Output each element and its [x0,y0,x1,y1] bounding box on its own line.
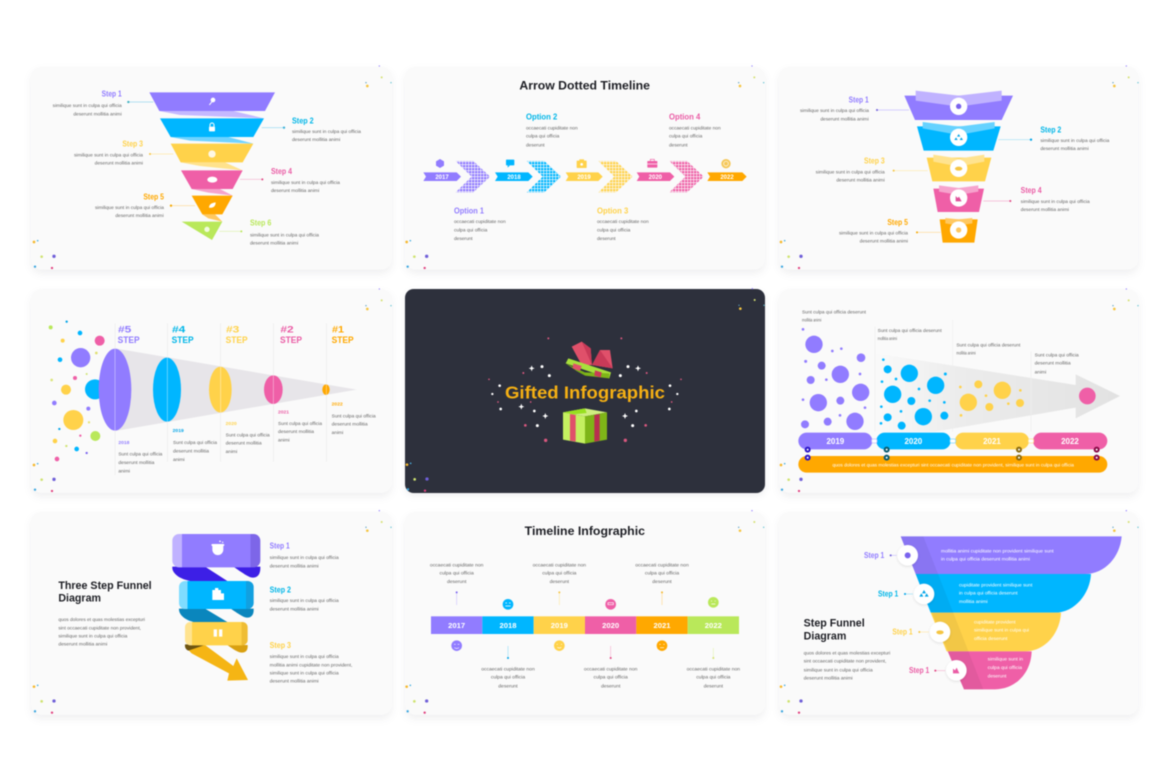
panel: dark cover [405,288,765,493]
option 2 [526,113,578,148]
option 4: occaecati cupiditate non [669,125,721,131]
step 6 label: Step 6 [250,219,272,228]
year ribbons: 2020 [649,175,663,181]
step 2 label: similique sunt in culpa qui officia [1040,138,1110,144]
description: deserunt mollitia animi [804,675,853,681]
heading: Diagram [58,593,101,605]
step label 1: Step 1 [864,551,885,560]
icon: open gift lid and bow [566,342,613,378]
top captions: culpa qui officia [440,571,474,577]
title: Timeline Infographic [525,524,645,538]
step 4 label: Step 4 [1021,186,1042,195]
band text: similique sunt in culpa qui [974,628,1029,634]
connector pins [806,448,1099,460]
top captions: occaecati cupiditate non [635,562,689,568]
bottom captions: culpa qui officia [696,675,731,681]
step 1 label: deserunt mollitia animi [820,116,869,122]
grey arrow [875,353,1120,432]
caption 2020: mollitia animi [878,336,897,342]
timeline bar: 2020 [602,621,619,630]
step 2 label: deserunt mollitia animi [292,137,340,143]
2019 text: deserunt mollitia [173,448,209,454]
description [58,617,145,648]
caption 2019: mollitia animi [802,318,821,324]
sparkles [488,337,682,442]
2018 text: animi [118,468,130,474]
heading #1 step: STEP [332,335,354,345]
ribbon funnel [172,534,260,681]
blue bubbles [880,358,948,430]
step 4 label [983,186,1090,213]
option 4: Option 4 [669,113,701,122]
band text: cupiditate provident similique sunt [959,582,1033,588]
step label 3: Step 1 [892,628,913,637]
band text [941,548,1054,679]
top captions: deserunt [550,579,570,585]
caption 2021: Sunt culpa qui officia deserunt [956,342,1021,348]
step 1 text: Step 1 [270,541,290,550]
heading #4 step: STEP [172,335,194,345]
caption 2022: deserunt mollitia [1035,361,1071,367]
step 4 label: similique sunt in culpa qui officia [271,180,340,186]
step label 3 [892,628,929,637]
year ribbons: 2018 [507,175,521,181]
emoji icons [451,597,719,651]
dotted chevrons [456,161,704,192]
step 5 label: deserunt mollitia animi [115,213,164,219]
funnel [149,92,275,240]
caption 2022: Sunt culpa qui officia [1035,353,1079,359]
step 5 label: Step 5 [143,192,164,201]
step 3 text: deserunt mollitia animi [270,679,319,685]
top captions: deserunt [447,579,467,585]
icon: gift box [563,408,607,444]
timeline bar: 2022 [705,621,722,630]
caption 2019 [802,310,867,324]
heading: Step Funnel [804,618,865,630]
2020 text: 2020 [226,421,237,427]
description: sint occaecati cupiditate non provident, [58,625,141,631]
step 3 text: Step 3 [270,641,291,650]
funnel [904,91,1013,243]
2019 text: animi [173,457,185,463]
heading #2 step: STEP [280,335,302,345]
step 5 label: similique sunt in culpa qui officia [839,231,908,237]
step 3 label: deserunt mollitia animi [95,161,143,167]
heading [58,580,152,605]
step 3 label: similique sunt in culpa qui officia [74,153,143,159]
yellow bubbles [959,380,1024,417]
divider lines [115,323,326,475]
step 2 label: Step 2 [1040,125,1062,134]
bottom captions: culpa qui officia [594,675,628,681]
2018 text: Sunt culpa qui officia [118,452,163,458]
option 1: deserunt [454,236,473,242]
step 4 label [240,167,340,194]
heading: Three Step Funnel [58,580,152,592]
step 5 label [839,218,941,245]
step 1 label: similique sunt in culpa qui officia [800,108,869,114]
step 6 label: deserunt mollitia animi [250,240,298,246]
band text: in culpa qui officia deserunt mollitia animi [941,556,1030,562]
step 3 label [816,156,928,183]
description: quos dolores et quas molestias excepturi [804,650,890,656]
ellipses [99,349,330,431]
top captions: culpa qui officia [645,571,679,577]
2020 text: deserunt mollitia [226,441,262,447]
option 2: occaecati cupiditate non [526,125,578,131]
timeline bar: 2018 [499,621,517,630]
caption 2020: Sunt culpa qui officia deserunt [878,328,942,334]
timeline bar: 2019 [551,621,568,630]
caption 2019: Sunt culpa qui officia deserunt [802,310,867,316]
year ribbons: 2017 [435,175,449,181]
step label 4 [909,666,945,675]
heading #5 step [118,324,140,345]
heading #3 step: STEP [226,335,248,345]
step 2 text [270,585,339,612]
2022 text: Sunt culpa qui officia [332,413,376,419]
2021 text [278,409,322,444]
2022 text: animi [332,430,343,436]
step 4 label: Step 4 [271,167,292,176]
timeline bar: 2017 [448,621,465,630]
2021 text: animi [278,438,290,444]
caption 2020 [878,328,942,342]
panel: layered funnel with five steps [779,65,1139,270]
heading #3 step [226,324,248,345]
panel: step funnel diagram [779,510,1139,715]
step 2 label [998,125,1110,152]
year ribbons [423,172,747,181]
heading #1 step [332,324,354,345]
top captions: occaecati cupiditate non [430,562,484,568]
step 3 label: Step 3 [122,140,143,149]
step label 2 [878,589,913,598]
panel: timeline infographic [405,510,765,715]
step 2 label: Step 2 [292,116,314,125]
2021 text: deserunt mollitia [278,429,314,435]
option 3: occaecati cupiditate non [597,219,649,225]
2018 text [118,440,163,474]
step label 4: Step 1 [909,666,930,675]
title: Arrow Dotted Timeline [519,79,650,93]
step 5 label: similique sunt in culpa qui officia [95,205,164,211]
2020 text [226,421,270,455]
orange bar: quos dolores et quas molestias excepturi sint occaecati cupiditate non provident, similique sunt in culpa qui officia [832,463,1074,469]
description: deserunt mollitia animi [58,642,107,648]
stems [456,591,714,659]
purple bubbles [801,328,869,430]
heading #2 step: #2 [280,324,294,334]
step 2 text: similique sunt in culpa qui officia [270,598,339,604]
2022 text: 2022 [332,401,343,407]
2018 text: 2018 [118,440,130,446]
panel: cone steps with ellipses [31,288,392,493]
step 3 text: mollitia animi cupiditate non provident, [270,662,352,668]
step 2 label [262,116,361,143]
year ribbons: 2019 [577,175,591,181]
band text: culpa qui officia [988,665,1022,671]
heading: Diagram [804,631,846,643]
top captions: deserunt [652,579,672,585]
band text: mollitia animi [959,599,988,605]
step 6 label [219,219,319,246]
heading #2 step [280,324,302,345]
option 4: culpa qui officia [669,134,703,140]
option 3: Option 3 [597,207,629,216]
step 2 label: similique sunt in culpa qui officia [292,129,361,135]
step label 2: Step 1 [878,589,899,598]
panel: arrow dotted timeline [405,65,765,270]
step 1 label: Step 1 [849,95,869,104]
step 4 label: deserunt mollitia animi [1021,207,1069,213]
description [804,650,890,681]
option 4 [669,113,721,148]
divider lines [875,320,1031,432]
step 3 label [74,140,173,167]
year ribbons: 2022 [720,175,734,181]
heading #5 step: STEP [118,335,140,345]
description: similique sunt in culpa qui officia [58,634,128,640]
top captions: occaecati cupiditate non [533,562,586,568]
step 4 label: deserunt mollitia animi [271,188,319,194]
scattered bubbles [49,320,105,461]
step 1 label [53,90,153,117]
step 5 label: Step 5 [887,218,908,227]
step 1 text [270,541,339,569]
timeline icons [436,159,731,168]
band text: similique sunt in [988,657,1023,663]
timeline bar: 2021 [653,621,671,630]
step 3 text [270,641,352,685]
band text: cupiditate provident [974,619,1016,625]
heading #5 step: #5 [118,324,131,334]
heading #4 step: #4 [172,324,185,334]
top captions: culpa qui officia [542,571,577,577]
bottom captions: deserunt [601,683,621,689]
year pills: 2021 [983,437,1001,446]
title: Gifted Infographic [505,382,665,402]
timeline bar [431,616,739,634]
description: similique sunt in culpa qui officia [804,667,873,673]
step 1 text: similique sunt in culpa qui officia [270,555,339,561]
bottom captions: deserunt [704,683,724,689]
2020 text: animi [226,449,237,455]
step 3 label: Step 3 [864,156,885,165]
band text: mollitia animi cupiditate non provident similique sunt [941,548,1054,554]
description: sint occaecati cupiditate non provident, [804,659,886,665]
step 1 label: Step 1 [102,90,122,99]
option 1 [454,207,506,242]
2021 text: Sunt culpa qui officia [278,421,322,427]
2018 text: deserunt mollitia [118,460,155,466]
bottom captions [481,667,740,689]
band text: in culpa qui officia deserunt [959,590,1018,596]
orange bar [798,456,1107,473]
2021 text: 2021 [278,409,289,415]
option 2: culpa qui officia [526,134,560,140]
icon badges [897,545,967,681]
step 1 label [800,95,909,122]
caption 2021: mollitia animi [956,350,976,356]
step 3 label: deserunt mollitia animi [836,177,885,183]
option 4: deserunt [669,142,688,148]
year pills [798,433,1107,449]
step 3 text: similique sunt in culpa qui officia [270,654,339,660]
step 3 text: similique sunt in culpa qui officia [270,671,339,677]
option 3: deserunt [597,236,616,242]
year pills: 2019 [826,437,845,446]
2019 text [173,428,217,463]
step 5 label [95,192,195,219]
2019 text: 2019 [173,428,184,434]
year pills: 2022 [1061,437,1079,446]
caption 2022 [1035,353,1079,375]
caption 2021 [956,342,1021,356]
heading #1 step: #1 [332,324,344,334]
step 2 text: deserunt mollitia animi [270,606,319,612]
step 1 label: deserunt mollitia animi [73,111,122,117]
panel: three step funnel diagram [31,510,392,715]
option 1: Option 1 [454,207,485,216]
step 1 label: similique sunt in culpa qui officia [53,103,122,109]
caption 2022: animi [1035,369,1046,375]
description: quos dolores et quas molestias excepturi [58,617,145,623]
panel: bubbles timeline [779,288,1139,493]
heading [804,618,865,643]
bottom captions: deserunt [498,683,518,689]
2020 text: Sunt culpa qui officia [226,433,270,439]
step 6 label: similique sunt in culpa qui officia [250,232,319,238]
bottom captions: culpa qui officia [491,675,525,681]
option 1: culpa qui officia [454,227,488,233]
step 4 label: similique sunt in culpa qui officia [1021,199,1090,205]
heading #4 step [172,324,194,345]
option 3: culpa qui officia [597,227,631,233]
option 1: occaecati cupiditate non [454,219,506,225]
step 1 text: deserunt mollitia animi [270,563,319,569]
option 3 [597,207,649,242]
bottom captions: occaecati cupiditate non [687,667,740,673]
2022 text [332,401,376,436]
band text: deserunt [988,673,1007,679]
year pills: 2020 [904,437,923,446]
bottom captions: occaecati cupiditate non [584,667,638,673]
top captions [430,562,689,585]
2022 text: deserunt mollitia [332,421,368,427]
curved funnel [901,536,1122,689]
step 2 text: Step 2 [270,585,291,594]
grey cone [115,348,357,431]
band text: officia deserunt [974,636,1008,642]
step 2 label: deserunt mollitia animi [1040,146,1089,152]
option 2: Option 2 [526,113,558,122]
2019 text: Sunt culpa qui officia [173,440,217,446]
bottom captions: occaecati cupiditate non [481,667,535,673]
heading #3 step: #3 [226,324,239,334]
step 3 label: similique sunt in culpa qui officia [816,169,885,175]
option 2: deserunt [526,142,545,148]
step 5 label: deserunt mollitia animi [860,239,908,245]
pink bubble [1079,388,1096,404]
panel: inverted funnel with six steps [31,65,392,270]
